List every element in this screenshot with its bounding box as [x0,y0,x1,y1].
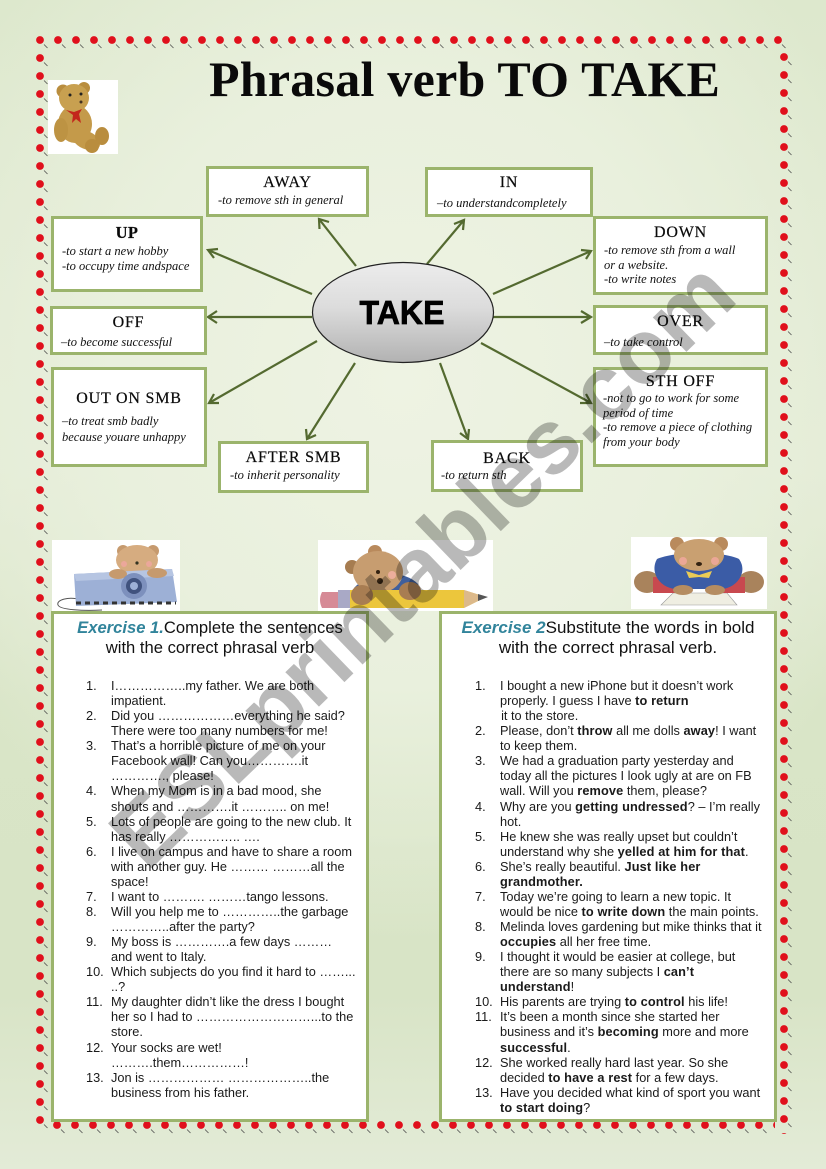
arrow: to OVER [493,311,591,323]
list: exercise 1 sentences: I want to ………. ………tango lessons. [111,889,329,904]
list: exercise 2 sentences: Today we’re going to learn a new topic. It [500,889,731,904]
icon: teddy bear with red bow [48,80,118,154]
icon: bear on pencil [318,540,493,611]
panel: AFTER SMB: AFTER SMB [246,449,341,466]
list: exercise 1 sentences: When my Mom is in a bad mood, she [111,783,321,798]
list: exercise 1 sentences: 5. [86,814,97,829]
heading: exercise 2: with the correct phrasal verb. [499,638,717,657]
list: exercise 1 sentences: 2. [86,708,97,723]
list: exercise 2 sentences: 9. [475,949,486,964]
arrow: to AFTER SMB [306,363,355,439]
panel: UP: -to start a new hobby [62,244,168,258]
panel: OFF: –to become successful [61,335,172,349]
list: exercise 2 sentences: 4. [475,798,486,814]
list: exercise 2 sentences: It’s been a month since she started her [500,1009,719,1024]
list: exercise 2 sentences: successful. [500,1040,571,1054]
panel: STH OFF [593,367,768,467]
list: exercise 1 sentences: …………., please! [111,768,214,783]
list: exercise 2 sentences: 2. [475,723,486,738]
panel: UP [51,216,203,292]
list: exercise 1 sentences: 4. [86,783,97,798]
list: exercise 2 sentences: to keep them. [500,738,577,753]
list: exercise 2 sentences: wall. Will you remove them, please? [500,783,707,798]
list: exercise 1 sentences: Facebook wall! Can you………….it [111,753,308,768]
list: exercise 2 sentences: He knew she was really upset but couldn’t [500,829,737,844]
list: exercise 1 sentences: Your socks are wet! [111,1040,222,1054]
panel: AFTER SMB [218,441,369,493]
list: exercise 2 sentences: His parents are trying to control his life! [500,994,728,1009]
list: exercise 2 sentences: 11. [475,1009,492,1024]
panel: STH OFF: -not to go to work for some [603,391,739,405]
panel: UP: -to occupy time andspace [62,259,189,273]
panel: IN: –to understandcompletely [437,196,566,210]
list: exercise 1 sentences: There were too many numbers for me! [111,723,328,738]
list: exercise 1 sentences: 1. [86,678,97,693]
panel: IN: IN [500,174,518,191]
list: exercise 1 sentences: her so I had to ………………………...to the [111,1009,353,1024]
list: exercise 1 sentences: with another guy. He ……… ………all the [111,859,345,874]
list: exercise 2 sentences: occupies all her free time. [500,934,651,949]
list: exercise 2 sentences: 8. [475,919,486,934]
list: exercise 2 sentences: to start doing? [500,1100,590,1115]
panel: BACK: BACK [483,450,531,467]
panel: DOWN: -to remove sth from a wall [604,243,735,257]
list: exercise 2 sentences: would be nice to write down the main points. [500,904,759,919]
panel: exercise 1 [51,611,369,1122]
list: exercise 1 sentences: Will you help me to …………..the garbage [111,904,348,919]
panel: STH OFF: -to remove a piece of clothing [603,420,752,434]
list: exercise 1 sentences: 8. [86,904,97,919]
list: exercise 1 sentences: Jon is ……………… ………………..the [111,1070,329,1085]
list: exercise 1 sentences: and went to Italy. [111,949,206,964]
list: exercise 2 sentences: Please, don’t throw all me dolls away! I want [500,723,756,738]
icon: bear writing [631,537,767,609]
list: exercise 1 sentences: business from his father. [111,1085,249,1100]
panel: OUT ON SMB: OUT ON SMB [76,390,182,407]
list: exercise 2 sentences: 6. [475,859,486,874]
panel: STH OFF: from your body [603,434,680,448]
list: exercise 1 sentences: …………..after the party? [111,919,255,934]
panel: DOWN [593,216,768,295]
panel: OFF: OFF [113,314,144,331]
list: exercise 2 sentences: Have you decided what kind of sport you want [500,1085,760,1100]
arrow: to IN [427,220,464,264]
list: exercise 1 sentences: My daughter didn’t like the dress I bought [111,994,344,1009]
panel: OUT ON SMB: –to treat smb badly [62,414,158,428]
list: exercise 1 sentences: Lots of people are going to the new club. It [111,814,351,829]
panel: OFF [50,306,207,355]
panel: exercise 2 [439,611,777,1122]
list: exercise 1 sentences: 3. [86,738,97,753]
panel: AFTER SMB: -to inherit personality [230,468,340,482]
list: exercise 2 sentences: properly. I guess I have to return [500,693,689,708]
list: exercise 1 sentences: Did you ………………everything he said? [111,708,345,723]
list: exercise 2 sentences: 12. [475,1055,493,1070]
list: exercise 2 sentences: decided to have a rest for a few days. [500,1070,719,1085]
panel: OUT ON SMB: because youare unhappy [62,430,186,444]
panel: UP: UP [116,223,138,242]
heading: exercise 1: with the correct phrasal verb [106,638,314,657]
central ellipse: TAKE [312,262,494,364]
list: exercise 1 sentences: 12. [86,1040,104,1054]
panel: BACK [431,440,583,492]
panel: STH OFF: STH OFF [646,373,715,390]
list: exercise 2 sentences: business and it’s becoming more and more [500,1024,749,1039]
panel: OVER [593,305,768,355]
list: exercise 1 sentences: 7. [86,889,97,904]
list: exercise 2 sentences: 13. [475,1085,493,1100]
heading: exercise 1: Exercise 1.Complete the sentences [77,618,343,637]
list: exercise 2 sentences: it to the store. [501,708,578,723]
list: exercise 1 sentences: 10. [86,964,104,979]
panel: DOWN: -to write notes [604,272,676,286]
heading: exercise 1 [77,618,343,657]
list: exercise 2 sentences: I thought it would be easier at college, but [500,949,735,964]
list: exercise 1 sentences: 9. [86,934,97,949]
panel: DOWN: or a website. [604,258,668,272]
arrow: to UP [208,249,312,294]
list: exercise 2 sentences: understand why she yelled at him for that. [500,844,749,859]
arrow: to OFF [208,311,312,323]
list: exercise 1 sentences: My boss is ………….a few days ……… [111,934,332,949]
list: exercise 1 sentences: 6. [86,844,97,859]
list: exercise 2 sentences: understand! [500,979,574,994]
central ellipse: TAKE: TAKE [360,294,444,331]
list: exercise 2 sentences: We had a graduation party yesterday and [500,753,734,768]
arrow: to STH OFF [481,343,591,403]
list: exercise 1 sentences: I……………..my father. We are both [111,678,314,693]
watermark: ESLprintables.com: ESLprintables.com [91,242,754,887]
list: exercise 2 sentences: I bought a new iPhone but it doesn’t work [500,678,733,693]
list: exercise 1 sentences: shouts and ………….it ……….. on me! [111,798,329,814]
list: exercise 2 sentences: Melinda loves gardening but mike thinks that it [500,919,762,934]
list: exercise 2 sentences: today all the pictures I look ugly at are on FB [500,768,752,783]
arrow: to DOWN [493,250,591,294]
list: exercise 2 sentences: 5. [475,829,486,844]
arrow: to BACK [440,363,469,439]
list: exercise 1 sentences: Which subjects do you find it hard to ……... [111,964,356,979]
panel: OVER: –to take control [604,335,683,349]
arrow: to OUT ON SMB [209,341,317,403]
list: exercise 1 sentences: ..? [111,979,125,994]
list: exercise 2 sentences: She’s really beautiful. Just like her [500,859,700,874]
heading: exercise 2 [462,618,754,657]
panel: STH OFF: period of time [603,406,673,420]
panel: BACK: -to return sth [441,468,507,482]
panel: AWAY: -to remove sth in general [218,193,343,207]
list: exercise 2 sentences: grandmother. [500,874,583,889]
list: exercise 1 sentences: That’s a horrible picture of me on your [111,738,326,753]
list: exercise 2 sentences: hot. [500,814,521,829]
list: exercise 2 sentences: 7. [475,889,486,904]
list: exercise 2 sentences: there are so many subjects I can’t [500,964,694,979]
panel: OVER: OVER [657,313,704,330]
heading: exercise 2: Exercise 2Substitute the words in bold [462,618,754,637]
list: exercise 1 sentences: I live on campus and have to share a room [111,844,352,859]
list: exercise 1 sentences: ……….them……………! [111,1055,248,1070]
list: exercise 1 sentences: has really …………….. …. [111,829,260,844]
list: exercise 2 sentences: 10. [475,994,493,1009]
list: exercise 1 sentences: space! [111,874,149,889]
title: Phrasal verb TO TAKE [209,51,720,107]
list: exercise 2 sentences: 3. [475,753,486,768]
list: exercise 2 sentences: 1. [475,678,486,693]
list: exercise 1 sentences: store. [111,1024,143,1039]
list: exercise 2 sentences [475,678,762,1115]
list: exercise 1 sentences: 11. [86,994,103,1009]
panel: DOWN: DOWN [654,224,707,241]
panel: AWAY: AWAY [263,174,312,191]
arrow: to AWAY [319,219,356,266]
panel: OUT ON SMB [51,367,207,467]
panel: IN [425,167,593,217]
list: exercise 2 sentences: Why are you getting undressed? – I’m really [500,798,760,814]
panel: AWAY [206,166,369,217]
icon: bear on camera [52,540,180,611]
list: exercise 1 sentences: 13. [86,1070,104,1085]
list: exercise 1 sentences [86,678,356,1100]
list: exercise 1 sentences: impatient. [111,693,166,708]
list: exercise 2 sentences: She worked really hard last year. So she [500,1055,728,1070]
